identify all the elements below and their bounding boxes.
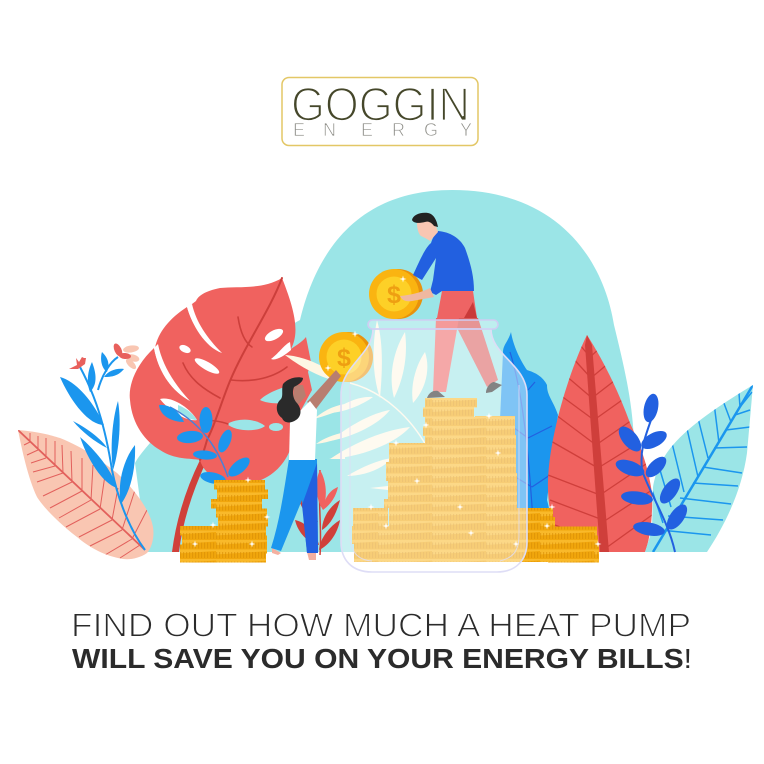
jar inner edge <box>350 385 519 561</box>
logo <box>282 78 478 146</box>
blue leaves <box>60 352 135 504</box>
man neck and face <box>417 220 438 241</box>
headline line two: WILL SAVE YOU ON YOUR ENERGY BILLS ! <box>72 643 692 674</box>
logo subtitle: ENERGY <box>293 120 472 140</box>
blue leaf veins <box>510 352 552 552</box>
coin stack right <box>520 508 599 562</box>
woman arm <box>307 370 341 409</box>
teal leaf right <box>645 385 753 552</box>
peach flower <box>112 342 140 371</box>
red leaf veins <box>548 345 652 548</box>
small red flower <box>69 357 86 369</box>
jar lid rim <box>368 320 498 329</box>
central coin stacks <box>352 398 527 562</box>
cream palm fronds behind jar <box>285 320 427 490</box>
logo wordmark: GOGGIN <box>291 78 470 130</box>
small red plant behind woman <box>295 470 340 555</box>
headline <box>71 606 692 674</box>
woman shirt <box>289 401 317 460</box>
man placing coin <box>369 213 502 398</box>
woman feet <box>272 548 316 560</box>
dark blue plant <box>614 392 691 552</box>
coin held by man: $ <box>387 281 401 309</box>
monstera veins <box>183 278 287 460</box>
monstera white slit upper <box>187 304 222 353</box>
man shoes <box>427 382 502 398</box>
monstera plant <box>130 278 312 552</box>
man hand <box>400 288 434 301</box>
man hair <box>412 213 438 227</box>
woman hair <box>277 377 303 422</box>
red leaf midrib <box>585 335 609 552</box>
man front leg <box>433 318 459 392</box>
small blue plant on monstera <box>159 405 253 486</box>
woman reaching up <box>271 370 341 560</box>
teal leaf veins <box>652 385 753 552</box>
headline line one: FIND OUT HOW MUCH A HEAT PUMP <box>71 606 691 644</box>
coin held by man <box>369 269 423 319</box>
monstera holes <box>160 326 292 431</box>
man shorts <box>437 291 477 318</box>
teal background shape <box>135 190 640 552</box>
red leaf right <box>548 335 652 552</box>
monstera leaf <box>130 278 312 484</box>
coin held by woman: $ <box>337 344 351 372</box>
blue flower plant <box>60 342 145 550</box>
woman trousers <box>271 459 318 553</box>
man sweater <box>413 231 474 295</box>
peach leaf left <box>18 430 153 559</box>
man rear leg <box>452 318 498 387</box>
glass jar <box>341 320 527 572</box>
blue leaf right of jar <box>500 332 560 552</box>
coin held by woman <box>319 332 373 382</box>
peach leaf veins <box>18 430 147 558</box>
sparkles <box>192 276 602 548</box>
coin stack left <box>180 480 268 562</box>
monstera white slit lower <box>154 344 190 401</box>
woman face <box>293 385 306 405</box>
